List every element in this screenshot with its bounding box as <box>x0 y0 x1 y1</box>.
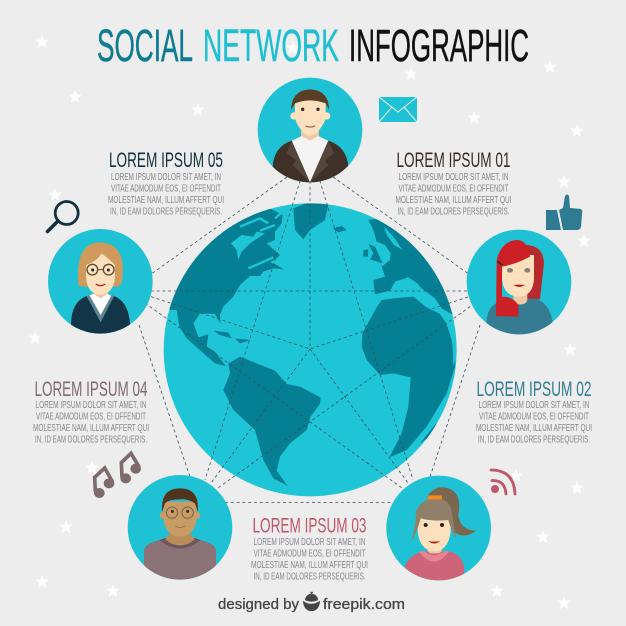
text block: lorem ipsum 01: LOREM IPSUM 01 <box>396 148 510 172</box>
text block: lorem ipsum 04: MOLESTIAE NAM, ILLUM AFFERT QUI <box>33 423 149 434</box>
text block: lorem ipsum 04: LOREM IPSUM 04 <box>34 377 148 401</box>
hudson bay <box>231 232 265 260</box>
icon: magnifier <box>48 202 78 232</box>
continent: south america <box>223 357 321 486</box>
islands: caribbean <box>213 331 251 343</box>
text block: lorem ipsum 04 <box>33 377 149 446</box>
globe <box>164 202 462 496</box>
avatar: man in suit <box>258 78 362 187</box>
text block: lorem ipsum 05 <box>108 148 224 218</box>
island: britain <box>368 244 383 263</box>
text block: lorem ipsum 05: MOLESTIAE NAM, ILLUM AFFERT QUI <box>108 195 224 206</box>
title <box>97 20 529 71</box>
text block: lorem ipsum 05: LOREM IPSUM DOLOR SIT AMET, IN <box>111 172 221 183</box>
text block: lorem ipsum 01: MOLESTIAE NAM, ILLUM AFFERT QUI <box>396 195 512 206</box>
text block: lorem ipsum 03 <box>251 514 368 582</box>
network dashed lines <box>139 175 480 502</box>
avatar: woman with glasses <box>48 229 153 337</box>
continent: north america <box>167 208 284 366</box>
text block: lorem ipsum 01: IN, ID EAM DOLORES PERSEQUERIS. <box>398 206 510 218</box>
avatar: man with glasses <box>128 475 232 583</box>
text block: lorem ipsum 01: LOREM IPSUM DOLOR SIT AMET, IN <box>398 172 508 183</box>
text block: lorem ipsum 03: VITAE ADMODUM EOS, EI OFFENDIT <box>254 548 366 560</box>
text block: lorem ipsum 04: VITAE ADMODUM EOS, EI OFFENDIT <box>36 412 146 422</box>
footer credit: freepik.com <box>323 597 405 613</box>
island: iceland <box>333 226 347 232</box>
text block: lorem ipsum 04: IN, ID EAM DOLORES PERSEQUERIS. <box>35 434 147 446</box>
avatar: girl with ponytail <box>386 476 491 587</box>
text block: lorem ipsum 03: IN, ID EAM DOLORES PERSEQUERIS. <box>254 572 366 582</box>
continent: greenland <box>293 202 328 239</box>
seas: mediterranean, black, baltic <box>384 227 423 291</box>
avatar: red haired woman <box>467 230 571 337</box>
island: ireland <box>363 249 368 257</box>
text block: lorem ipsum 04: LOREM IPSUM DOLOR SIT AMET, IN <box>36 400 146 411</box>
title: SOCIAL <box>97 20 193 71</box>
island: madagascar <box>420 423 437 443</box>
icon: rss signal <box>491 470 515 494</box>
arctic channels <box>240 212 283 268</box>
text block: lorem ipsum 01 <box>396 148 512 218</box>
icon: envelope <box>379 97 417 122</box>
footer credit <box>218 592 405 613</box>
title: NETWORK <box>203 20 339 71</box>
text block: lorem ipsum 03: LOREM IPSUM DOLOR SIT AMET, IN <box>254 537 366 548</box>
text block: lorem ipsum 05: VITAE ADMODUM EOS, EI OFFENDIT <box>111 184 221 194</box>
continent: africa <box>362 297 455 457</box>
icon: thumbs up <box>546 194 582 230</box>
text block: lorem ipsum 02 <box>476 377 592 446</box>
text block: lorem ipsum 01: VITAE ADMODUM EOS, EI OFFENDIT <box>398 184 509 194</box>
continent: eurasia <box>368 219 452 314</box>
icon: music notes <box>94 453 141 498</box>
text block: lorem ipsum 05: LOREM IPSUM 05 <box>109 148 223 172</box>
text block: lorem ipsum 03: MOLESTIAE NAM, ILLUM AFFERT QUI <box>251 560 368 571</box>
text block: lorem ipsum 05: IN, ID EAM DOLORES PERSEQUERIS. <box>110 206 222 218</box>
footer credit: designed by <box>218 597 300 613</box>
text block: lorem ipsum 03: LOREM IPSUM 03 <box>252 514 367 538</box>
icon: freepik logo <box>303 592 320 611</box>
